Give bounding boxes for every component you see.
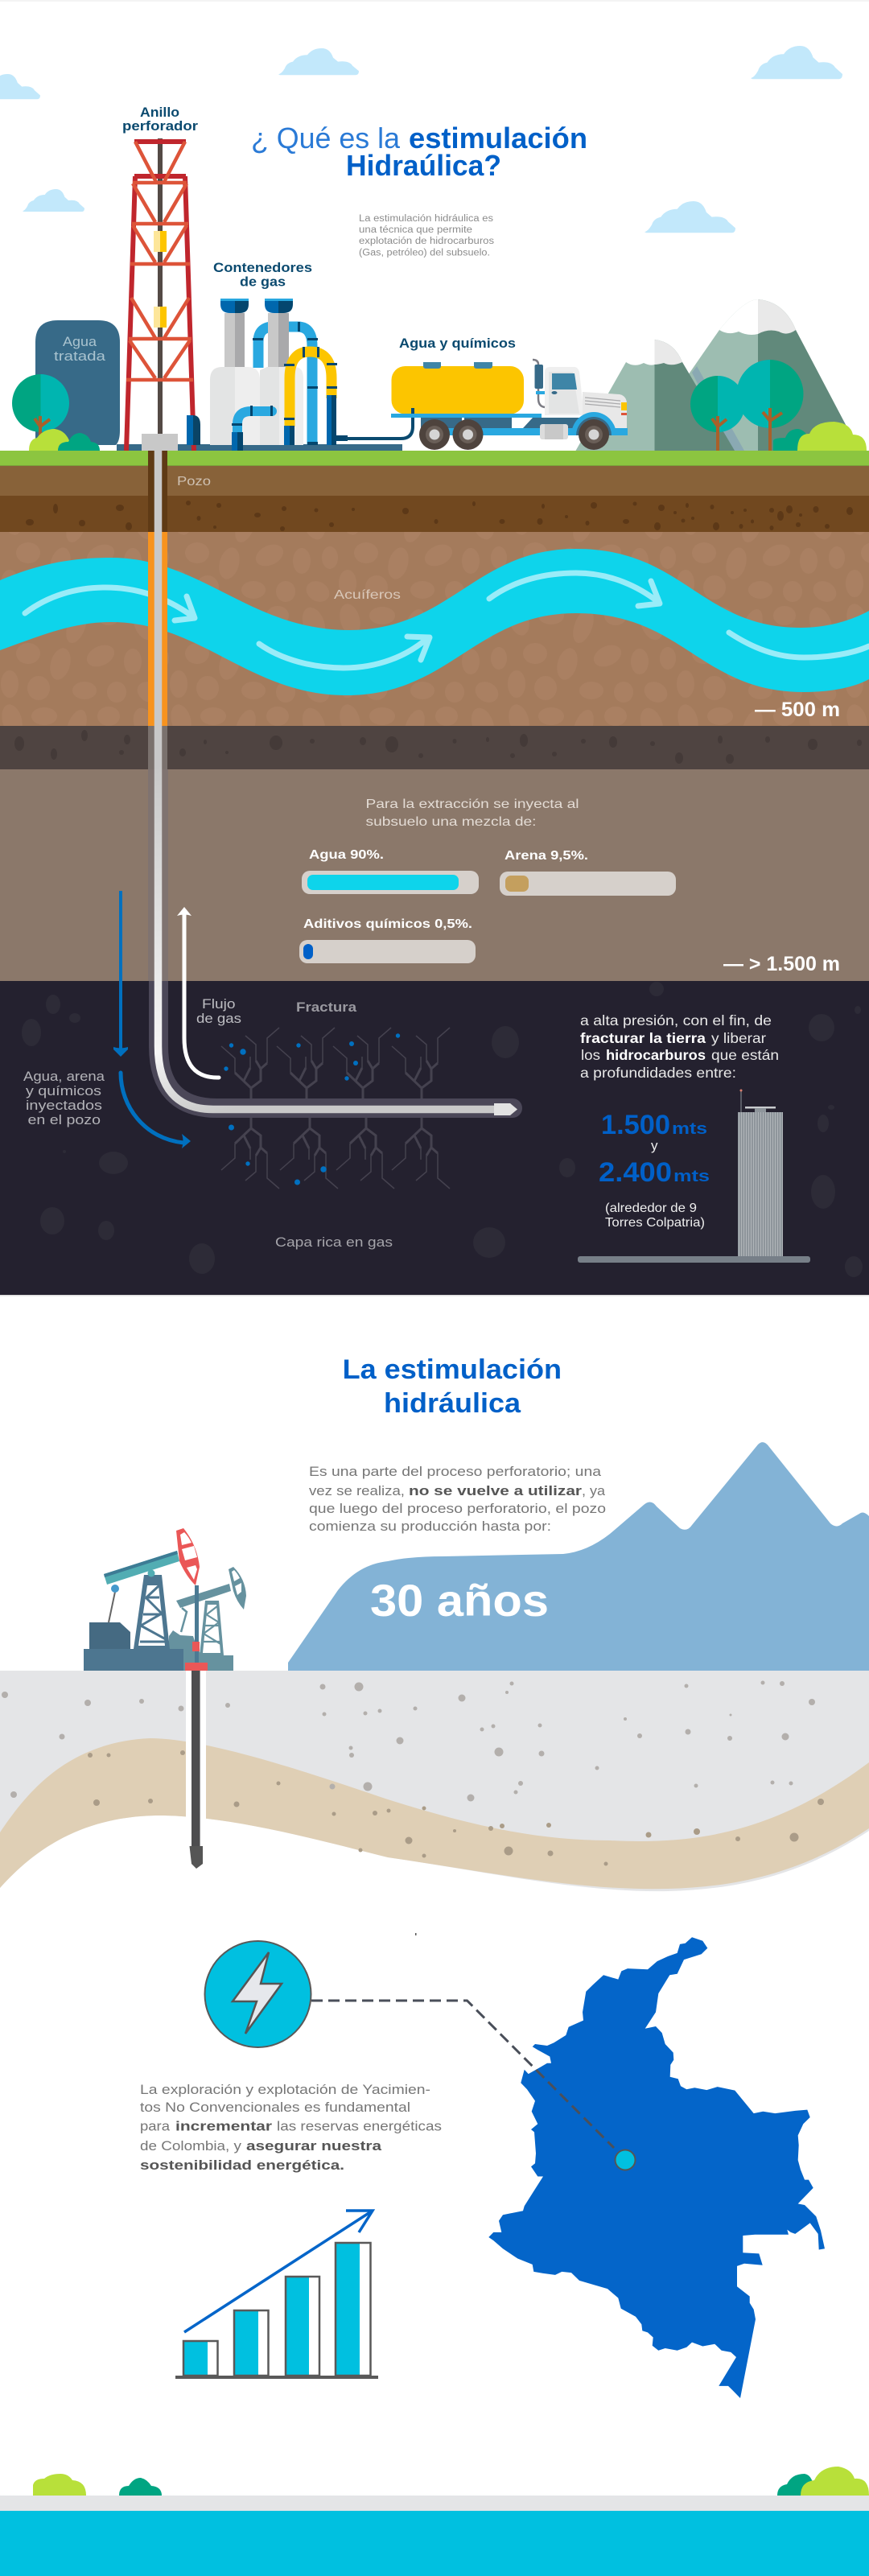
arrows: water flow (25, 573, 869, 668)
title: estimulación (409, 122, 587, 155)
chart: aditivos bar: Aditivos químicos 0,5%. (303, 917, 472, 931)
text block: alta presion: que están (711, 1047, 779, 1063)
icon: trees right (690, 360, 803, 451)
text block: proceso: vez se realiza, (309, 1483, 405, 1498)
label: capa rica en gas: Capa rica en gas (275, 1234, 393, 1250)
text block: proceso: , ya (582, 1483, 606, 1498)
heading: hidráulica (384, 1388, 521, 1419)
label: anillo perforador: Anillo (140, 105, 179, 120)
icon: wheels (419, 419, 609, 450)
text block: intro: La estimulación hidráulica es (359, 214, 493, 224)
text block: exploracion: las reservas energéticas (277, 2118, 442, 2134)
text block: proceso: no se vuelve a utilizar (409, 1483, 582, 1498)
label: agua arena y quimicos: en el pozo (27, 1112, 101, 1127)
text block: alta presion: los (581, 1047, 600, 1063)
fractures (221, 1028, 450, 1189)
label: agua arena y quimicos: inyectados (26, 1098, 102, 1113)
dashed connector (311, 2001, 614, 2148)
icon: second pumpjack (169, 1567, 246, 1671)
text block: intro (359, 214, 494, 258)
numbers: depth: mts (672, 1120, 707, 1138)
ground stones (2, 1680, 815, 1801)
particles (224, 1033, 400, 1185)
numbers: depth: 1.500 (601, 1110, 670, 1140)
chart: rising bars (175, 2211, 378, 2379)
label: 1500 m: — > 1.500 m (723, 953, 840, 975)
title: Hidraúlica? (346, 149, 501, 182)
layer: dark soil (0, 496, 869, 532)
panel: section two (0, 1354, 869, 1891)
label: anillo perforador: perforador (122, 118, 198, 134)
layer: gas-rich shale (0, 981, 869, 1296)
footer band (0, 2496, 869, 2576)
numbers: depth: Torres Colpatria) (605, 1216, 705, 1230)
icon: first pumpjack (84, 1528, 200, 1671)
platform (117, 444, 402, 451)
numbers: depth: 2.400 (599, 1157, 672, 1188)
text block: alta presion: a profundidades entre: (580, 1065, 736, 1081)
label: agua arena y quimicos: Agua, arena (23, 1069, 105, 1084)
text block: exploracion: para (140, 2118, 171, 2134)
label: agua tratada: tratada (54, 348, 106, 364)
tank: agua tratada (35, 320, 120, 445)
icon: bottom bushes (33, 2467, 869, 2496)
sand layer (0, 1738, 869, 1889)
layer: pebbles (0, 532, 869, 726)
text block: intro: una técnica que permite (359, 225, 472, 235)
label: 500 m: — 500 m (755, 699, 840, 721)
chart: agua bar (302, 848, 479, 894)
numbers: depth: mts (673, 1168, 710, 1185)
icon: tree and bushes left (12, 374, 100, 451)
text block: exploracion: incrementar (175, 2118, 272, 2134)
arrow: injection down (113, 891, 128, 1057)
numbers: depth: y (651, 1138, 658, 1153)
big number: 30 anos: 30 años (370, 1575, 549, 1626)
text block: exploracion (140, 2082, 442, 2173)
text block: mezcla (365, 798, 579, 829)
label: agua y quimicos: Agua y químicos (399, 336, 516, 351)
text block: proceso (309, 1464, 606, 1534)
icon: truck (346, 360, 628, 450)
icon: energy bolt (204, 1941, 311, 2047)
chart: agua bar: Agua 90%. (309, 848, 384, 862)
well casing (148, 451, 517, 1115)
label: contenedores de gas (213, 260, 312, 290)
label: flujo de gas: Flujo (202, 996, 235, 1012)
text block: intro: (Gas, petróleo) del subsuelo. (359, 248, 490, 258)
chart: arena bar (500, 849, 676, 896)
arrow: gas flow (177, 907, 219, 1078)
blue mountain (288, 1442, 869, 1671)
panel: energy and Colombia (0, 1933, 869, 2576)
text block: mezcla: Para la extracción se inyecta al (365, 798, 579, 811)
heading: La estimulación (343, 1354, 562, 1385)
arrow: injection curve (121, 1073, 191, 1148)
label: contenedores de gas: de gas (240, 274, 286, 290)
text block: alta presion: fracturar la tierra (580, 1030, 706, 1046)
icon: bushes right (773, 422, 867, 451)
gray ground (0, 1671, 869, 1891)
chart: arena bar: Arena 9,5%. (505, 849, 588, 863)
text block: proceso: comienza su producción hasta por: (309, 1519, 551, 1534)
layer: grass (0, 451, 869, 467)
layer: taupe rock (0, 769, 869, 981)
map of Colombia (488, 1937, 825, 2398)
text block: exploracion: asegurar nuestra (246, 2138, 382, 2154)
text block: exploracion: sostenibilidad energética. (140, 2158, 344, 2173)
panel: subsurface layers (0, 451, 869, 1296)
label: agua tratada (54, 334, 106, 364)
aquifer water band (0, 549, 869, 695)
map marker (615, 2150, 636, 2170)
numbers: depth: (alrededor de 9 (605, 1201, 697, 1215)
text block: alta presion (580, 1012, 779, 1081)
gas containers (210, 299, 348, 451)
icon: clouds (0, 46, 842, 233)
text block: alta presion: y liberar (711, 1030, 766, 1046)
text block: proceso: Es una parte del proceso perforatorio; una (309, 1464, 602, 1479)
text block: exploracion: de Colombia, y (140, 2138, 242, 2154)
text block: alta presion: a alta presión, con el fin, de (580, 1012, 772, 1028)
text block: alta presion: hidrocarburos (606, 1047, 706, 1063)
title (251, 122, 587, 182)
label: pozo: Pozo (177, 475, 211, 488)
icon: drilling tower (126, 138, 200, 451)
text block: exploracion: La exploración y explotación de Yacimien- (140, 2082, 430, 2097)
title: ¿ Qué es la (251, 122, 401, 155)
heading (343, 1354, 562, 1419)
well bore (158, 451, 496, 1109)
well shaft (185, 1585, 208, 1869)
label: agua arena y quimicos (23, 1069, 105, 1127)
text block: intro: explotación de hidrocarburos (359, 237, 494, 246)
drill tip (494, 1103, 517, 1115)
label: acuiferos: Acuíferos (334, 588, 401, 602)
icon: colpatria tower (578, 1090, 810, 1263)
mountains (576, 299, 859, 451)
label: contenedores de gas: Contenedores (213, 260, 312, 275)
label: anillo perforador (122, 105, 198, 134)
text block: proceso: que luego del proceso perforatorio, el pozo (309, 1501, 606, 1516)
panel: sky and surface (0, 46, 867, 451)
chart: aditivos bar (299, 917, 476, 963)
sand stones (88, 1750, 824, 1865)
label: flujo de gas: de gas (196, 1011, 241, 1026)
label: fractura: Fractura (296, 999, 357, 1015)
label: agua tratada: Agua (63, 334, 97, 349)
arrow: growth (184, 2211, 373, 2332)
label: agua arena y quimicos: y químicos (26, 1083, 101, 1098)
layer: dark rock (0, 726, 869, 769)
text block: exploracion: tos No Convencionales es fundamental (140, 2100, 410, 2115)
label: flujo de gas (196, 996, 241, 1026)
layer: topsoil (0, 466, 869, 496)
text block: mezcla: subsuelo una mezcla de: (365, 815, 536, 829)
numbers: depth (599, 1110, 710, 1230)
